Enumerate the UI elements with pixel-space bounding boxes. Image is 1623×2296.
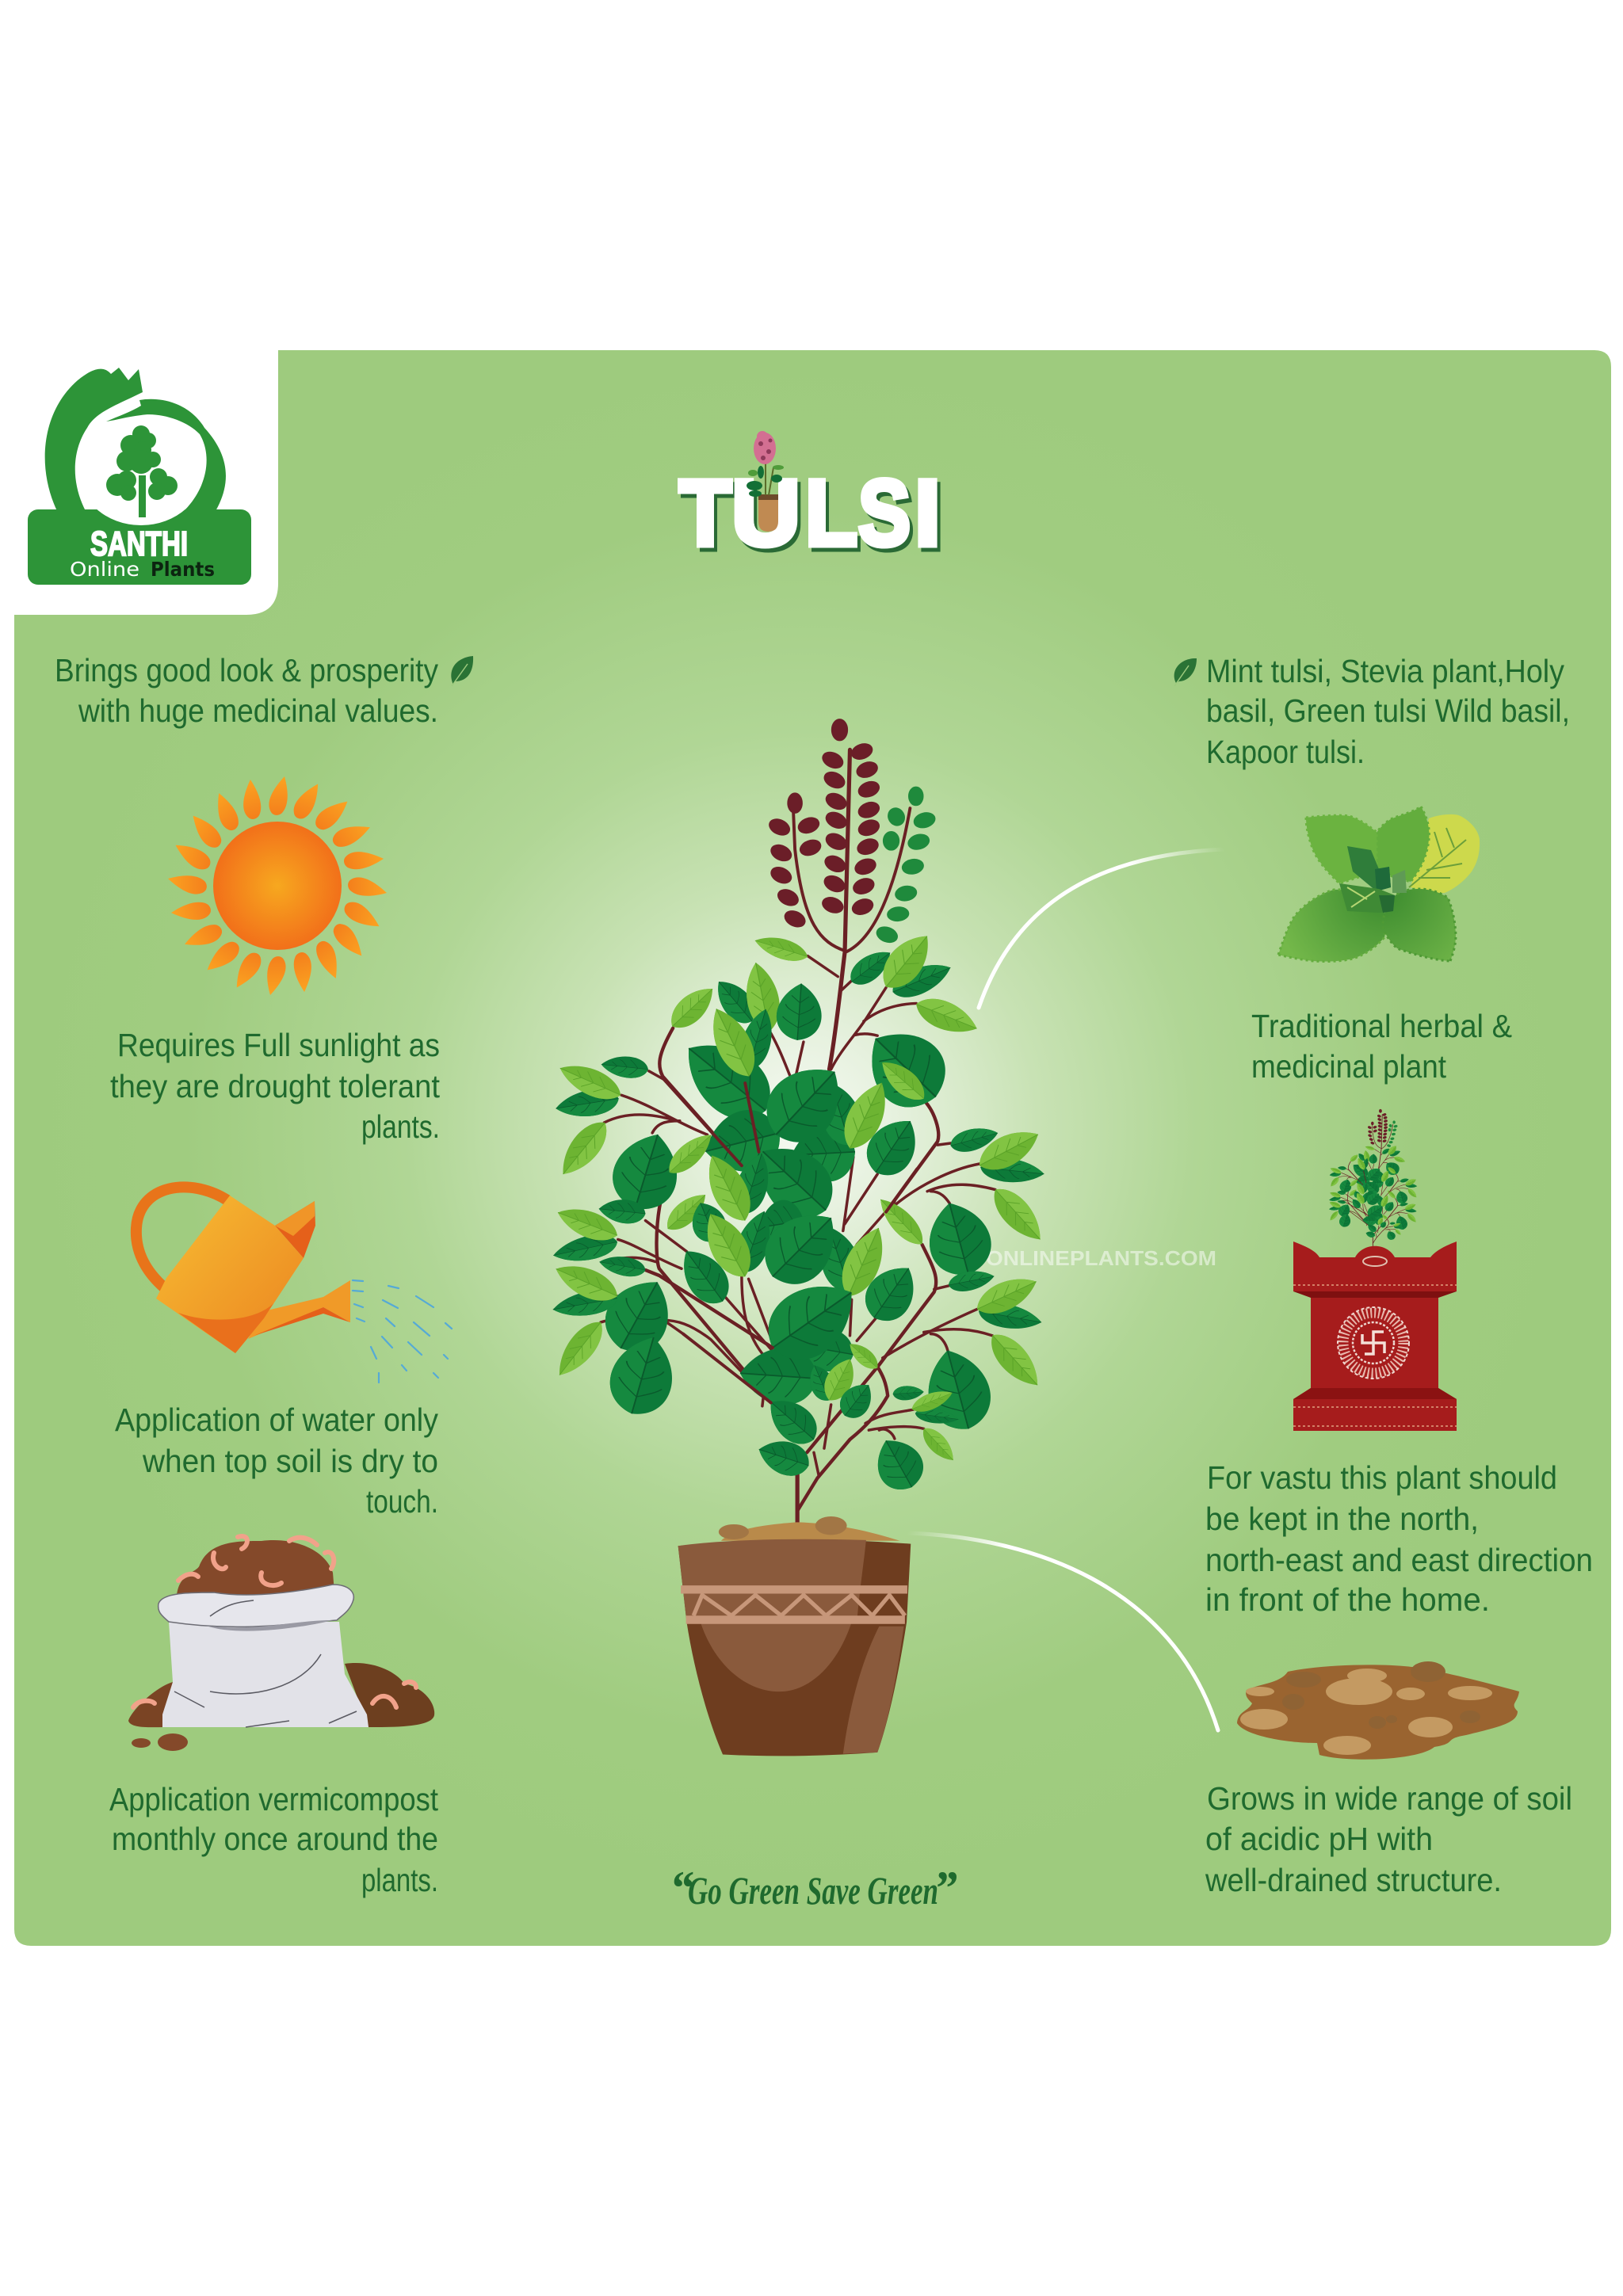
text: vermicompost: plants.	[361, 1862, 438, 1898]
text: watering	[115, 1402, 438, 1520]
text: watering: Application of water only	[115, 1402, 438, 1438]
title: TULSI with plant in the U: T	[679, 461, 731, 566]
title: TULSI with plant in the U: I	[915, 461, 941, 566]
text: traditional herbal	[1251, 1008, 1512, 1085]
text: soil: well-drained structure.	[1205, 1862, 1502, 1898]
text: vermicompost: Application vermicompost	[109, 1781, 439, 1817]
text: soil	[1205, 1780, 1572, 1898]
title: TULSI with plant in the U	[679, 431, 941, 566]
text: good look and prosperity: with huge medicinal values.	[78, 692, 438, 729]
title: TULSI with plant in the U: S	[858, 461, 911, 566]
tagline: ”	[934, 1862, 957, 1914]
text: soil: of acidic pH with	[1205, 1821, 1433, 1857]
icon: watering can	[136, 1187, 350, 1353]
icon: clay pot	[678, 1516, 911, 1756]
title: TULSI with plant in the U: U	[731, 461, 800, 566]
text: vastu: in front of the home.	[1205, 1581, 1490, 1618]
icon: water droplets	[353, 1280, 452, 1383]
logo: Santhi Online Plants: Plants	[151, 558, 215, 581]
tagline: “	[670, 1862, 693, 1914]
icon: bullet leaf right	[1174, 658, 1197, 686]
text: good look and prosperity: Brings good look & prosperity	[55, 652, 438, 688]
text: traditional herbal: medicinal plant	[1251, 1048, 1447, 1085]
logo: Santhi Online Plants: SANTHI	[90, 524, 188, 563]
text: sunlight	[110, 1027, 441, 1145]
chart: central tulsi plant	[549, 719, 1051, 1527]
text: varieties of tulsi: Kapoor tulsi.	[1206, 734, 1365, 770]
text: watering: touch.	[366, 1483, 438, 1520]
text: varieties of tulsi	[1206, 653, 1570, 770]
text: varieties of tulsi: Mint tulsi, Stevia plant,Holy	[1206, 653, 1564, 689]
text: varieties of tulsi: basil, Green tulsi Wild basil,	[1206, 692, 1570, 729]
text: vermicompost	[109, 1781, 439, 1898]
text: good look and prosperity	[55, 652, 438, 729]
icon: red tulsi altar	[1293, 1241, 1457, 1431]
text: sunlight: plants.	[361, 1108, 440, 1145]
icon: small tulsi plant	[1328, 1109, 1418, 1246]
text: sunlight: Requires Full sunlight as	[117, 1027, 440, 1063]
tagline: Go Green Save Green	[688, 1868, 938, 1913]
text: vastu: be kept in the north,	[1205, 1501, 1479, 1537]
logo: Santhi Online Plants	[28, 368, 251, 585]
icon: soil mound	[1237, 1661, 1519, 1760]
icon: sun	[168, 776, 387, 995]
watermark: ONLINEPLANTS.COM	[986, 1246, 1216, 1270]
panel: green background with logo notch	[14, 350, 1611, 1946]
logo: Santhi Online Plants: Online	[70, 558, 139, 581]
icon: bullet leaf left	[451, 656, 473, 686]
tagline	[670, 1862, 957, 1914]
text: watering: when top soil is dry to	[142, 1443, 438, 1479]
icon: vermicompost sack	[128, 1536, 434, 1751]
title: TULSI with plant in the U: L	[805, 461, 857, 566]
text: sunlight: they are drought tolerant	[110, 1068, 441, 1104]
text: vastu	[1205, 1459, 1593, 1618]
arrow: plant to leaves	[979, 849, 1224, 1008]
text: traditional herbal: Traditional herbal &	[1251, 1008, 1512, 1044]
text: vastu: north-east and east direction	[1205, 1542, 1593, 1578]
text: soil: Grows in wide range of soil	[1207, 1780, 1572, 1817]
icon: tulsi leaves	[1278, 807, 1480, 962]
text: vermicompost: monthly once around the	[112, 1821, 438, 1857]
arrow: pot to soil	[907, 1533, 1218, 1730]
text: vastu: For vastu this plant should	[1207, 1459, 1557, 1496]
